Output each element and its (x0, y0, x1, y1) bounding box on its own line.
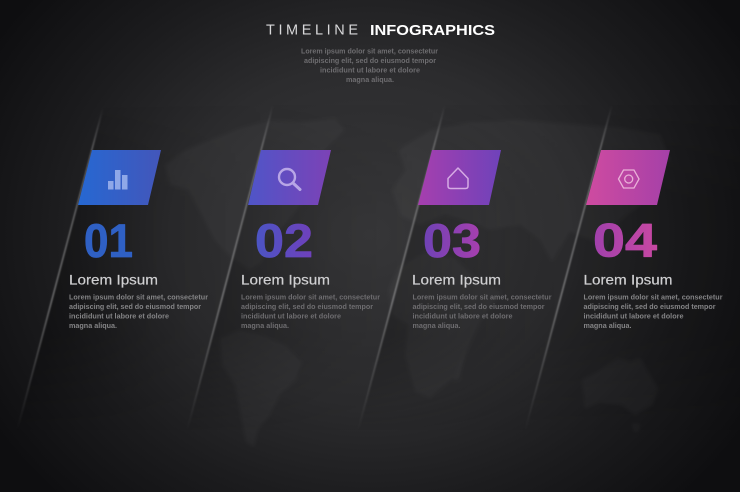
number 03: 03 (423, 214, 481, 267)
text 02: Lorem ipsum dolor sit amet, consectetur (241, 292, 380, 302)
text 01: magna aliqua. (69, 321, 117, 330)
text 03: Lorem ipsum dolor sit amet, consectetur (412, 292, 552, 302)
text 01: incididunt ut labore et dolore (69, 312, 169, 320)
heading 02: Lorem Ipsum (241, 272, 330, 288)
banner 01 (78, 150, 161, 205)
text 02: incididunt ut labore et dolore (241, 312, 341, 320)
intro text: magna aliqua. (346, 75, 394, 84)
world map (165, 118, 670, 447)
text 03: magna aliqua. (412, 321, 460, 330)
panel: step 03 (412, 150, 552, 330)
number 04: 04 (593, 214, 657, 266)
text 02: magna aliqua. (241, 321, 289, 330)
intro text: Lorem ipsum dolor sit amet, consectetur (301, 46, 438, 56)
heading 01: Lorem Ipsum (69, 272, 158, 288)
number 02: 02 (255, 214, 313, 267)
text 03: adipiscing elit, sed do eiusmod tempor (412, 302, 545, 311)
slanted panel shading (204, 184, 468, 378)
text 04: adipiscing elit, sed do eiusmod tempor (584, 302, 716, 311)
title (266, 22, 495, 39)
text 04: magna aliqua. (584, 321, 632, 330)
text 03 (412, 292, 552, 330)
heading 04: Lorem Ipsum (584, 272, 672, 288)
text 02 (241, 292, 380, 330)
text 04: incididunt ut labore et dolore (584, 312, 684, 320)
banner 03 (418, 150, 501, 205)
text 04: Lorem ipsum dolor sit amet, consectetur (584, 292, 723, 302)
text 01: Lorem ipsum dolor sit amet, consectetur (69, 292, 208, 302)
text 01: adipiscing elit, sed do eiusmod tempor (69, 302, 201, 311)
icon: magnifier (279, 169, 300, 190)
text 03: incididunt ut labore et dolore (412, 312, 512, 320)
title: INFOGRAPHICS (370, 22, 495, 39)
text 04 (584, 292, 723, 330)
text 01 (69, 292, 208, 330)
panel: step 04 (584, 150, 723, 330)
panel: step 02 (241, 150, 380, 330)
intro text: incididunt ut labore et dolore (320, 66, 420, 74)
number 01: 01 (84, 214, 133, 267)
heading 03: Lorem Ipsum (412, 272, 501, 288)
banner 04 (586, 150, 670, 205)
title: TIMELINE (266, 22, 358, 38)
intro text (301, 46, 438, 84)
panel: step 01 (69, 150, 208, 330)
intro text: adipiscing elit, sed do eiusmod tempor (304, 56, 436, 65)
icon: bar chart (108, 170, 128, 190)
icon: house (448, 168, 468, 188)
icon: hex nut (618, 170, 639, 188)
text 02: adipiscing elit, sed do eiusmod tempor (241, 302, 373, 311)
slanted divider lines (17, 105, 612, 430)
banner 02 (248, 150, 331, 205)
